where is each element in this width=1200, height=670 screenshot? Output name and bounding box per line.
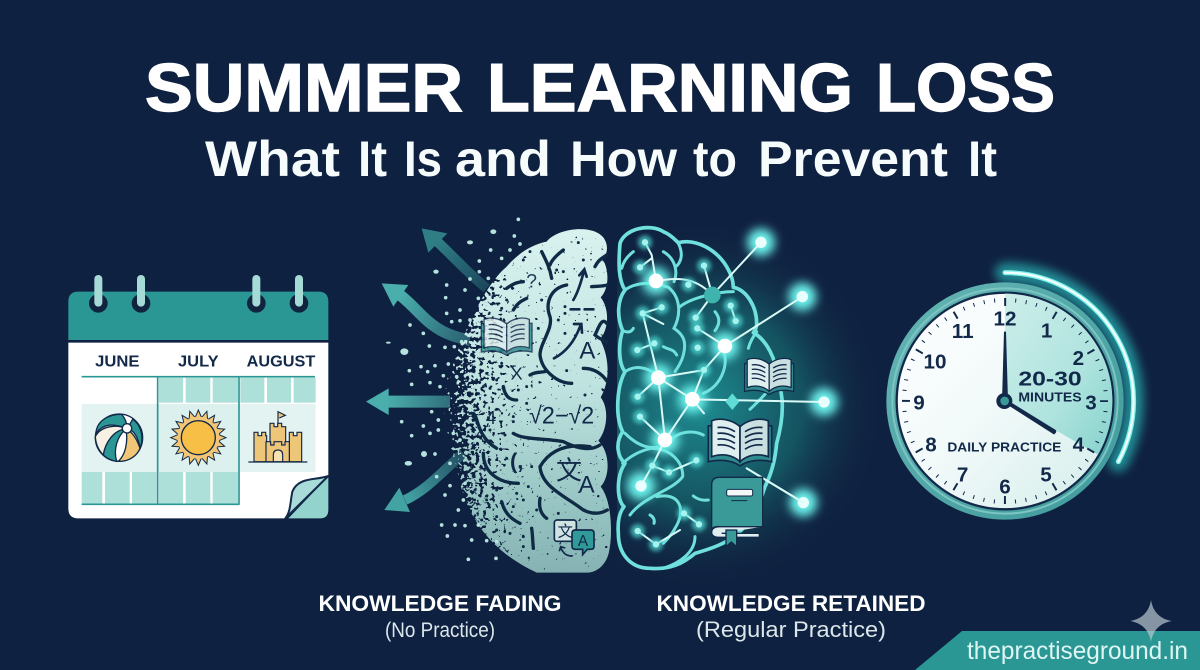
brain symbols: X bbox=[511, 363, 523, 383]
clock numerals: 12 bbox=[994, 308, 1016, 331]
subtitle: It bbox=[968, 131, 997, 187]
title bbox=[145, 50, 1055, 126]
clock numerals: 3 bbox=[1085, 392, 1097, 415]
subtitle: It bbox=[358, 131, 387, 187]
brain symbols: √2−√2 bbox=[529, 402, 594, 429]
clock hands bbox=[996, 332, 1056, 434]
brain symbols: A bbox=[579, 337, 595, 364]
clock numerals: 2 bbox=[1073, 347, 1084, 370]
subtitle: Prevent bbox=[758, 131, 948, 187]
small nodes halo bbox=[637, 242, 736, 544]
label: knowledge fading bbox=[318, 591, 562, 642]
month labels: AUGUST bbox=[247, 354, 316, 371]
month labels: JULY bbox=[178, 354, 219, 371]
dark specks bbox=[470, 243, 585, 547]
brain symbols bbox=[486, 271, 595, 499]
title: SUMMER bbox=[145, 50, 463, 126]
footer url: thepractiseground.in bbox=[967, 637, 1188, 665]
icon: beach ball bbox=[95, 414, 143, 461]
brain fold lines bbox=[473, 250, 607, 548]
title: LEARNING bbox=[487, 50, 853, 126]
clock text bbox=[947, 368, 1082, 454]
outer nodes bbox=[641, 242, 824, 503]
large particles bbox=[386, 229, 496, 466]
book icon lower bbox=[708, 419, 772, 466]
subtitle: to bbox=[693, 131, 737, 187]
calendar page bbox=[68, 343, 328, 518]
clock numerals bbox=[913, 308, 1097, 498]
footer banner bbox=[915, 631, 1200, 670]
clock text: DAILY PRACTICE bbox=[947, 439, 1061, 454]
month labels: JUNE bbox=[95, 354, 140, 371]
small arrows and dashes bbox=[554, 269, 593, 358]
brain symbols: 4 bbox=[486, 407, 496, 428]
clock numerals: 9 bbox=[913, 392, 925, 415]
clock rim bbox=[886, 282, 1124, 520]
highlighted 20-30 minute sector bbox=[1005, 294, 1112, 455]
label: knowledge retained bbox=[656, 591, 926, 642]
calendar cells bbox=[82, 377, 316, 504]
brain: knowledge retained bbox=[618, 228, 824, 569]
tick marks bbox=[904, 300, 1106, 502]
translate icon: 文 bbox=[558, 524, 573, 541]
subtitle: Is bbox=[404, 131, 442, 187]
icon: sand castle bbox=[248, 412, 307, 462]
brain symbols: 文 bbox=[556, 455, 582, 485]
label: knowledge fading: KNOWLEDGE FADING bbox=[318, 591, 562, 616]
clock numerals: 4 bbox=[1073, 433, 1085, 456]
brain symbols: ? bbox=[526, 271, 537, 292]
icon: sun bbox=[168, 408, 228, 468]
clock numerals: 5 bbox=[1040, 463, 1052, 486]
subtitle: What bbox=[205, 131, 340, 187]
label: knowledge retained: KNOWLEDGE RETAINED bbox=[656, 591, 926, 616]
clock face bbox=[897, 293, 1113, 509]
month labels bbox=[95, 354, 316, 371]
brain: knowledge fading bbox=[366, 219, 611, 573]
small nodes bbox=[637, 242, 736, 544]
subtitle: and bbox=[455, 131, 551, 187]
translate icon: A bbox=[578, 533, 589, 550]
teal hub nodes bbox=[704, 287, 739, 410]
network links bbox=[637, 242, 824, 544]
scattered particles bbox=[402, 219, 520, 559]
bright nodes bbox=[656, 281, 725, 440]
brain fill dissolving bbox=[444, 229, 611, 573]
clock numerals: 11 bbox=[952, 320, 974, 343]
calendar header bbox=[68, 292, 328, 340]
glowing arc bbox=[1005, 273, 1134, 462]
clock text: 20-30 bbox=[1018, 368, 1082, 390]
clock numerals: 6 bbox=[999, 475, 1011, 498]
glow behind retained brain bbox=[617, 205, 877, 605]
title: LOSS bbox=[876, 50, 1055, 126]
closed book icon bbox=[712, 477, 763, 547]
clock numerals: 10 bbox=[924, 350, 946, 373]
label: knowledge retained: (Regular Practice) bbox=[696, 617, 886, 642]
sparkle icon bbox=[1130, 600, 1172, 642]
brain outline bbox=[618, 228, 782, 569]
glow nodes bbox=[641, 242, 824, 503]
clock bbox=[886, 273, 1134, 520]
calendar bbox=[68, 275, 328, 518]
clock numerals: 7 bbox=[957, 463, 968, 486]
book icon upper bbox=[745, 358, 794, 395]
link over book bbox=[747, 468, 803, 503]
page curl bbox=[285, 476, 328, 518]
label: knowledge fading: (No Practice) bbox=[385, 619, 495, 642]
arrows flying out bbox=[366, 228, 487, 512]
clock text: MINUTES bbox=[1018, 389, 1082, 404]
book icon fading bbox=[481, 318, 532, 355]
brain folds bbox=[622, 243, 777, 568]
subtitle bbox=[205, 131, 997, 187]
brain symbols: A bbox=[579, 472, 595, 499]
brain symbols: (, bbox=[510, 448, 523, 473]
subtitle: How bbox=[570, 131, 677, 187]
calendar rings bbox=[89, 275, 308, 313]
clock numerals: 8 bbox=[925, 433, 937, 456]
translate icon bbox=[554, 520, 594, 556]
clock numerals: 1 bbox=[1041, 319, 1052, 342]
